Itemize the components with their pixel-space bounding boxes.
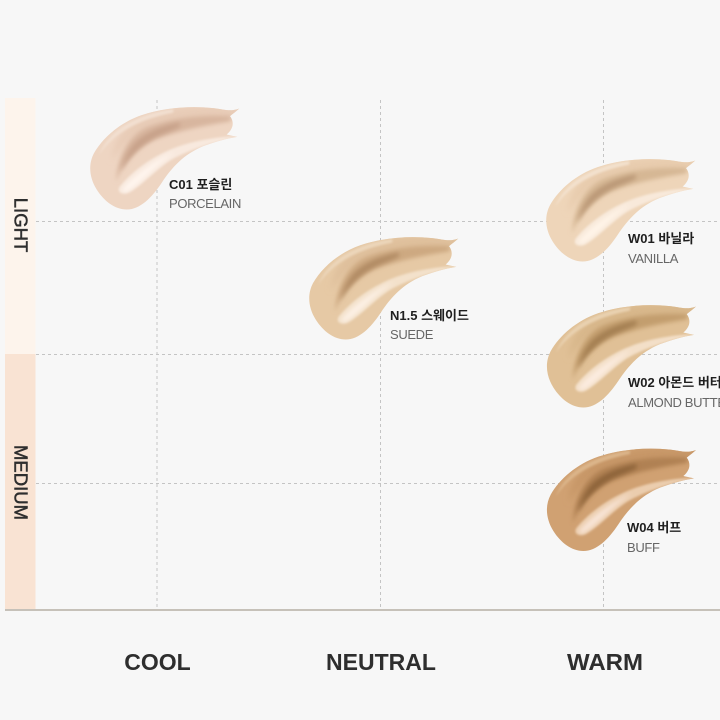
band: light (5, 98, 36, 354)
chart grid (36, 100, 720, 610)
label: C01: PORCELAIN (169, 196, 241, 211)
label: W02: W02 아몬드 버터 (628, 375, 720, 390)
label: N1.5: SUEDE (390, 327, 434, 342)
label: LIGHT: LIGHT (10, 198, 32, 252)
swatch: N1.5 suede (309, 236, 459, 339)
label: C01 (169, 177, 241, 211)
axis label: WARM: WARM (567, 649, 643, 675)
label: W04: BUFF (627, 540, 660, 555)
swatch: W02 almond butter (547, 304, 697, 407)
swatch: W01 vanilla (546, 158, 696, 261)
baseline axis (5, 609, 720, 611)
band: medium (5, 354, 36, 610)
swatch: C01 porcelain (90, 106, 240, 209)
panel: depth axis bands (5, 98, 36, 610)
label: W01: W01 바닐라 (628, 231, 694, 246)
swatch: W04 buff (547, 447, 697, 551)
axis label: COOL: COOL (124, 649, 191, 675)
label: W02 (628, 375, 720, 410)
label: W04: W04 버프 (627, 520, 681, 535)
label: MEDIUM: MEDIUM (10, 445, 32, 520)
label: W04 (627, 520, 681, 555)
label: W01: VANILLA (628, 251, 679, 266)
label: N1.5: N1.5 스웨이드 (390, 308, 469, 323)
axis label: NEUTRAL: NEUTRAL (326, 649, 436, 675)
label: C01: C01 포슬린 (169, 177, 232, 192)
label: W01 (628, 231, 694, 266)
label: N1.5 (390, 308, 469, 342)
